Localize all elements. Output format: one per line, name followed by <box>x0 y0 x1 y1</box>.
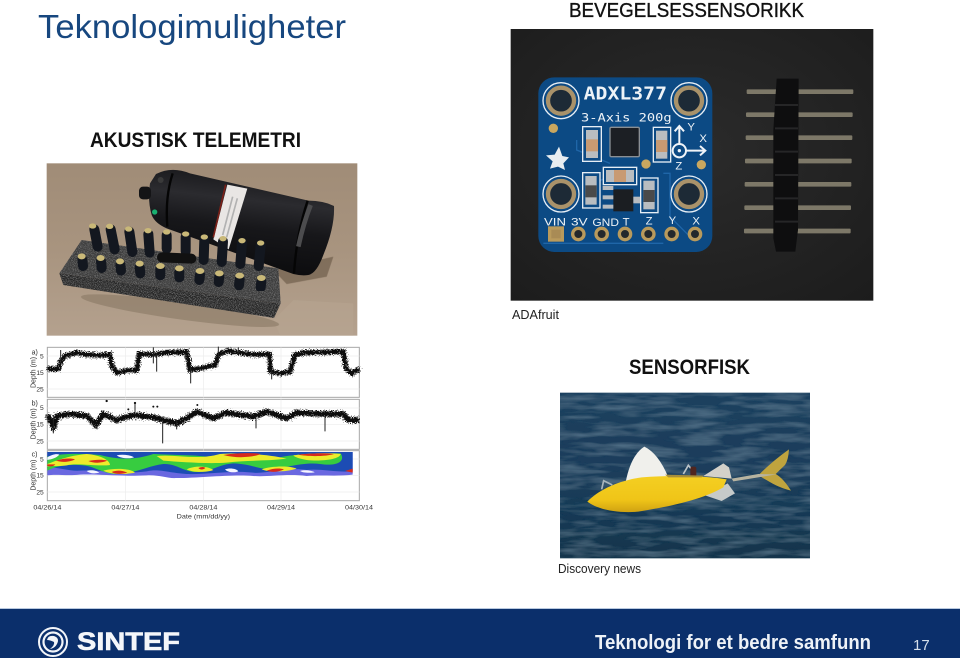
board silkscreen labels: Y <box>669 215 677 227</box>
title: Teknologimuligheter <box>38 8 346 45</box>
board silkscreen labels: Y <box>687 122 695 134</box>
chart x axis labels: 04/27/14 <box>111 504 140 511</box>
panel a: Depth (m) <box>30 357 37 388</box>
pins <box>78 223 266 287</box>
rear fins <box>703 463 732 479</box>
chart x axis labels: 04/30/14 <box>345 504 373 511</box>
circuit board <box>538 77 712 252</box>
panel b <box>30 399 359 449</box>
chart x axis labels <box>33 504 373 521</box>
page number: 17 <box>913 637 930 654</box>
footer slogan: Teknologi for et bedre samfunn <box>595 632 871 654</box>
icon: SINTEF logo <box>39 628 67 656</box>
panel b: b) <box>32 400 38 407</box>
photo: robotic sensor fish <box>560 393 810 558</box>
SINTEF wordmark: SINTEF <box>77 628 180 656</box>
board silkscreen labels: GND <box>592 217 619 229</box>
panel c <box>30 451 359 501</box>
body <box>587 476 727 512</box>
board silkscreen labels: 3V <box>571 216 588 228</box>
board silkscreen labels: 3-Axis 200g <box>581 110 672 124</box>
panel a: a) <box>32 350 38 357</box>
chart x axis labels: Date (mm/dd/yy) <box>177 514 230 521</box>
panel c: Depth (m) <box>30 460 37 491</box>
panel c: 25 <box>36 489 44 496</box>
header holes <box>550 228 701 240</box>
star logo <box>546 147 569 170</box>
panel c: 5 <box>40 456 44 463</box>
receiver cylinder <box>149 170 334 275</box>
depth chart <box>30 347 373 521</box>
dorsal fin <box>626 447 668 482</box>
heading: bevegelsessensorikk: BEVEGELSESSENSORIKK <box>569 0 805 22</box>
photo: ADXL377 accelerometer board <box>511 29 873 301</box>
heading: akustisk telemetri: AKUSTISK TELEMETRI <box>90 129 301 152</box>
axis marks <box>673 126 705 157</box>
board silkscreen labels: ADXL377 <box>584 84 667 104</box>
foam block <box>59 240 281 318</box>
panel a: 5 <box>40 354 44 361</box>
panel b: 25 <box>36 438 44 445</box>
panel b: 5 <box>40 405 44 412</box>
chart x axis labels: 04/28/14 <box>189 504 218 511</box>
board silkscreen labels: Z <box>675 160 682 172</box>
panel b: 15 <box>36 422 44 429</box>
board silkscreen labels: X <box>692 216 700 228</box>
board silkscreen labels: Z <box>646 216 653 228</box>
pin header <box>744 79 853 252</box>
panel a: 25 <box>36 387 44 394</box>
components <box>583 127 671 213</box>
board silkscreen labels: X <box>699 133 707 145</box>
board silkscreen labels: VIN <box>544 216 566 228</box>
chart x axis labels: 04/29/14 <box>267 504 295 511</box>
panel a <box>30 347 359 397</box>
board silkscreen labels <box>544 84 707 229</box>
photo: acoustic tags and receiver <box>47 163 357 336</box>
chip U1 <box>610 127 639 157</box>
panel b: Depth (m) <box>30 408 37 439</box>
caption: ADAfruit: ADAfruit <box>512 307 559 322</box>
footer bar <box>0 608 960 658</box>
handles <box>602 481 612 489</box>
heading: sensorfisk: SENSORFISK <box>629 356 750 379</box>
board silkscreen labels: T <box>623 216 630 228</box>
caption: discovery news: Discovery news <box>558 561 641 576</box>
tail fin <box>758 449 791 491</box>
panel c: c) <box>32 452 37 459</box>
panel a: 15 <box>36 370 44 377</box>
panel c: 15 <box>36 473 44 480</box>
chart x axis labels: 04/26/14 <box>33 504 62 511</box>
